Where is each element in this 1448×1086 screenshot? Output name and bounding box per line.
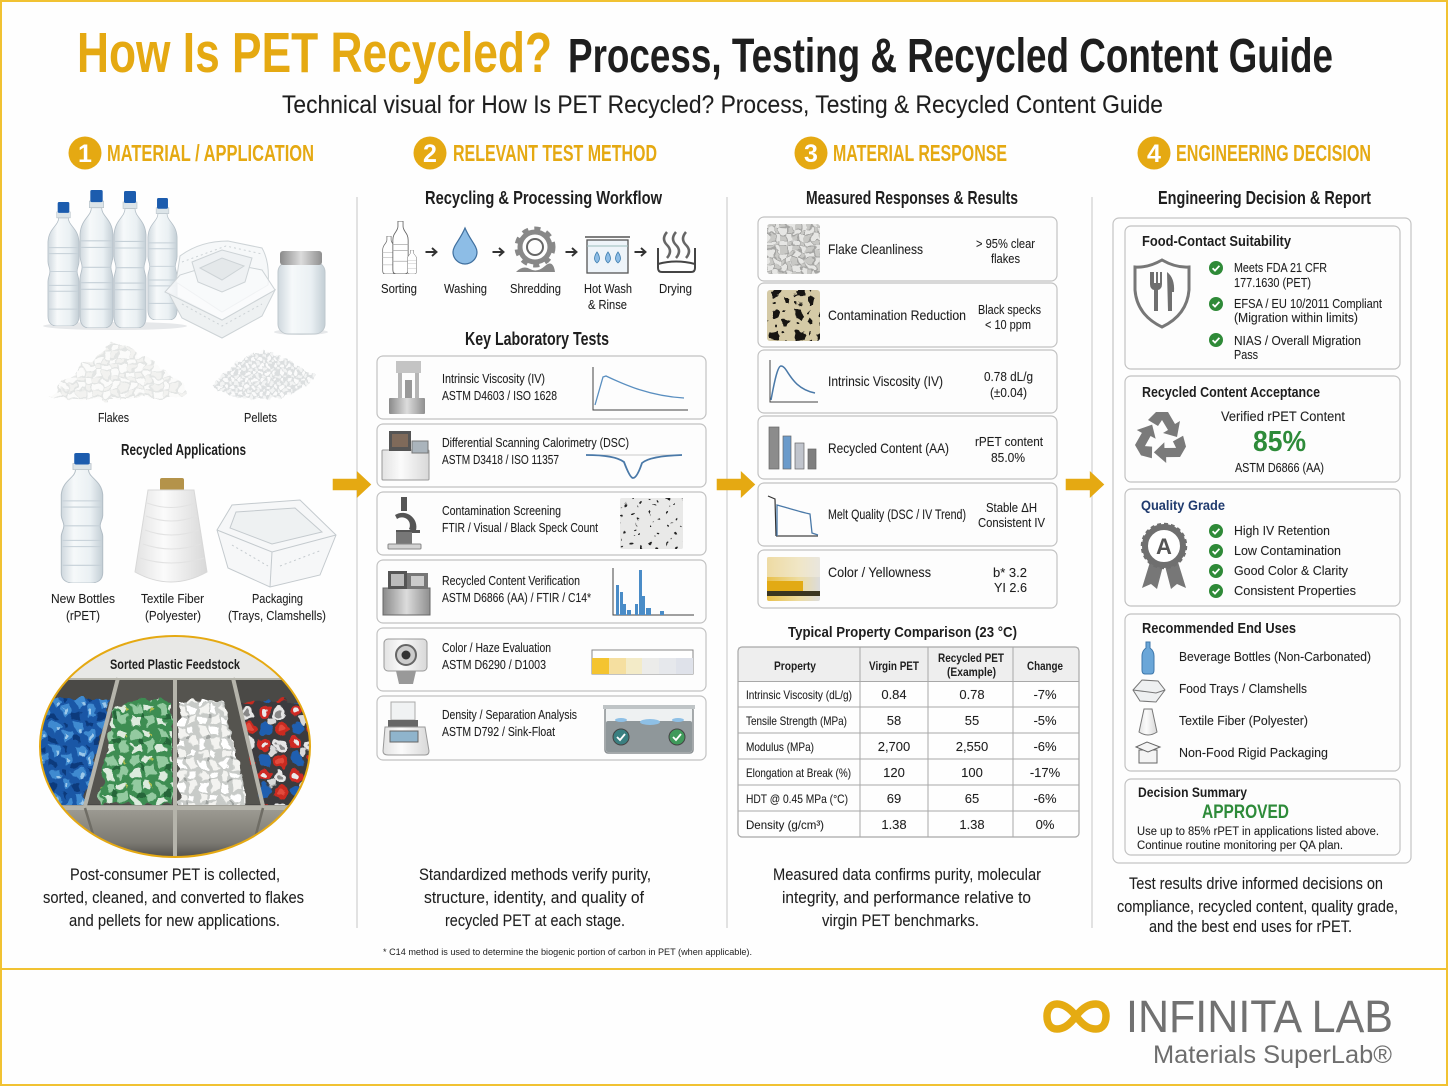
photo: sorted plastic feedstock (34, 634, 318, 859)
icon: grade A badge: A (1156, 534, 1172, 559)
card: food-contact suitability: Food-Contact Suitability (1142, 234, 1291, 250)
table: property comparison: 100 (961, 765, 983, 780)
footnote: * C14 method is used to determine the biogenic portion of carbon in PET (when applicable). (383, 947, 752, 958)
workflow labels: Hot Wash (584, 281, 632, 296)
icon: pellets pile (212, 351, 316, 399)
table: property comparison: 1.38 (959, 817, 985, 832)
icon: flakes pile (51, 342, 188, 399)
result card: intrinsic viscosity (758, 350, 1057, 413)
card: quality grade: Consistent Properties (1234, 583, 1356, 598)
table: property comparison: Change (1027, 659, 1063, 673)
table: property comparison: -5% (1033, 713, 1057, 728)
workflow labels: Washing (444, 281, 487, 296)
labels: new bottles: New Bottles (51, 591, 115, 606)
result card: flake cleanliness: Flake Cleanliness (828, 241, 923, 257)
card: quality grade: Quality Grade (1141, 497, 1225, 513)
table: property comparison: 0.78 (959, 687, 985, 702)
icon: new bottle (61, 453, 103, 583)
table: property comparison: -7% (1033, 687, 1057, 702)
table: property comparison: 2,700 (878, 739, 910, 754)
icon: colorimeter (384, 639, 427, 684)
labels: new bottles (51, 591, 115, 623)
icon: food-safe shield (1135, 260, 1189, 327)
step header 1 (68, 136, 314, 170)
result card: melt quality: Consistent IV (978, 516, 1046, 530)
table: property comparison: -17% (1030, 765, 1061, 780)
card: quality grade: High IV Retention (1234, 523, 1330, 538)
caption: column 2: structure, identity, and quality of (424, 888, 644, 907)
test card: intrinsic viscosity: ASTM D4603 / ISO 1628 (442, 389, 557, 403)
heading: workflow: Recycling & Processing Workflow (425, 187, 662, 208)
workflow labels: Shredding (510, 281, 561, 296)
step header 3: MATERIAL RESPONSE (833, 140, 1007, 166)
table: property comparison: Intrinsic Viscosity (dL/g) (746, 688, 852, 702)
result card: flake cleanliness (758, 217, 1057, 281)
arrow (566, 248, 576, 256)
result card: flake cleanliness: > 95% clear (976, 237, 1035, 251)
step header 4: 4 (1147, 140, 1161, 168)
card: food-contact suitability: Pass (1234, 348, 1258, 362)
heading: measured responses: Measured Responses & Results (806, 188, 1018, 208)
card: decision summary: Decision Summary (1138, 785, 1247, 800)
card: decision summary: APPROVED (1202, 802, 1289, 823)
labels: packaging: (Trays, Clamshells) (228, 608, 326, 623)
workflow labels: Drying (659, 281, 692, 296)
card: quality grade: Low Contamination (1234, 543, 1341, 558)
image: sink-float tank (603, 705, 695, 753)
result card: flake cleanliness: flakes (991, 252, 1020, 266)
test card: recycled content verification (377, 560, 706, 623)
step header 2: RELEVANT TEST METHOD (453, 140, 657, 166)
table: property comparison: Modulus (MPa) (746, 740, 814, 754)
test card: recycled content verification: Recycled Content Verification (442, 574, 580, 588)
table: property comparison: 120 (883, 765, 905, 780)
test card: color and haze (377, 628, 706, 691)
card: food-contact suitability: (Migration within limits) (1234, 311, 1358, 325)
card: recommended end uses: Textile Fiber (Polyester) (1179, 713, 1308, 728)
title (77, 21, 1333, 85)
icon: DSC instrument (382, 431, 429, 480)
card: recycled content acceptance: ASTM D6866 (AA) (1235, 461, 1324, 475)
icon: washing drop (453, 228, 477, 264)
image: speck count sample (620, 498, 683, 549)
test card: DSC (377, 424, 706, 487)
table: property comparison: 2,550 (956, 739, 988, 754)
icon: box (1136, 742, 1160, 763)
result card: intrinsic viscosity: 0.78 dL/g (984, 370, 1033, 384)
table: property comparison: (Example) (947, 665, 996, 679)
label: flakes: Flakes (98, 410, 129, 425)
caption: column 3: Measured data confirms purity, molecular (773, 865, 1041, 884)
test card: intrinsic viscosity (377, 356, 706, 419)
arrow: step 2 to 3 (717, 471, 755, 498)
card: food-contact suitability: EFSA / EU 10/2011 Compliant (1234, 297, 1382, 311)
result card: color yellowness: Color / Yellowness (828, 564, 931, 580)
icon: textile fiber cone (135, 478, 207, 582)
table: property comparison: 65 (965, 791, 979, 806)
workflow labels (381, 281, 692, 312)
label: pellets: Pellets (244, 410, 277, 425)
labels: packaging: Packaging (252, 591, 303, 606)
table: property comparison: HDT @ 0.45 MPa (°C) (746, 792, 848, 806)
card: decision summary: Use up to 85% rPET in applications listed above. (1137, 826, 1379, 838)
icon: grade A badge (1142, 524, 1186, 589)
result card: intrinsic viscosity: (±0.04) (990, 386, 1027, 400)
chart: spectrum peaks (613, 568, 694, 615)
workflow labels: Sorting (381, 281, 417, 296)
icon: infinity mark (1047, 1004, 1106, 1029)
table: property comparison: Recycled PET (938, 651, 1005, 665)
test card: contamination screening (377, 490, 706, 557)
card: recommended end uses: Food Trays / Clamshells (1179, 681, 1307, 696)
caption: column 3: integrity, and performance relative to (782, 888, 1031, 907)
panel: material response (738, 188, 1079, 930)
result card: color yellowness: YI 2.6 (994, 581, 1027, 595)
icon: viscometer (389, 361, 425, 414)
result card: recycled content: Recycled Content (AA) (828, 440, 949, 456)
card: recycled content acceptance: Recycled Content Acceptance (1142, 385, 1320, 401)
result card: contamination reduction: Contamination Reduction (828, 307, 966, 323)
caption: column 1 (43, 865, 304, 930)
card: decision summary (1125, 779, 1400, 855)
caption: column 1: sorted, cleaned, and converted to flakes (43, 888, 304, 907)
caption: column 2: recycled PET at each stage. (445, 911, 625, 930)
title: How Is PET Recycled? (77, 21, 552, 85)
arrow: step 3 to 4 (1066, 471, 1104, 498)
test card: density (377, 696, 706, 760)
result card: color yellowness (758, 550, 1057, 608)
table: property comparison: 58 (887, 713, 901, 728)
subtitle: Technical visual for How Is PET Recycled? Process, Testing & Recycled Content Guide (282, 91, 1163, 119)
test card: DSC: ASTM D3418 / ISO 11357 (442, 453, 559, 467)
logo: Infinita Lab: Materials SuperLab® (1153, 1041, 1393, 1069)
logo: Infinita Lab: INFINITA LAB (1126, 991, 1393, 1042)
table: property comparison: -6% (1033, 739, 1057, 754)
column dividers (357, 197, 1092, 928)
logo: Infinita Lab (1047, 991, 1393, 1069)
test card: density: Density / Separation Analysis (442, 708, 577, 722)
test card: color and haze: Color / Haze Evaluation (442, 641, 551, 655)
card: decision summary: Continue routine monitoring per QA plan. (1137, 840, 1343, 852)
table: property comparison: Density (g/cm³) (746, 818, 824, 832)
caption: column 4: Test results drive informed decisions on (1129, 874, 1383, 893)
result card: melt quality (758, 483, 1057, 546)
step header 3 (794, 136, 1007, 170)
caption: column 2 (419, 865, 651, 930)
table: property comparison: Elongation at Break (%) (746, 766, 851, 780)
result card: intrinsic viscosity: Intrinsic Viscosity (IV) (828, 373, 943, 389)
labels: textile fiber: (Polyester) (145, 608, 201, 623)
step header 2 (414, 136, 657, 170)
heading: recycled applications: Recycled Applications (121, 442, 246, 459)
labels: packaging (228, 591, 326, 623)
result card: melt quality: Melt Quality (DSC / IV Trend) (828, 506, 966, 522)
icon: tray (1133, 680, 1165, 702)
test card: contamination screening: FTIR / Visual / Black Speck Count (442, 521, 598, 535)
table: property comparison: 55 (965, 713, 979, 728)
card: recommended end uses: Beverage Bottles (Non-Carbonated) (1179, 649, 1371, 664)
result card: recycled content: 85.0% (991, 451, 1025, 465)
card: food-contact suitability: Meets FDA 21 CFR (1234, 261, 1327, 275)
result card: contamination reduction: Black specks (978, 303, 1041, 317)
table: property comparison: Tensile Strength (MPa) (746, 714, 847, 728)
table: property comparison: 69 (887, 791, 901, 806)
arrow (426, 248, 436, 256)
card: recycled content acceptance (1125, 376, 1400, 482)
card: recycled content acceptance: 85% (1253, 426, 1306, 458)
result card: contamination reduction: < 10 ppm (985, 318, 1031, 332)
caption: column 4: and the best end uses for rPET. (1149, 917, 1352, 936)
step header 1: 1 (78, 140, 92, 168)
icon: sorting bottles (383, 221, 416, 274)
chart: DSC dip (586, 455, 682, 478)
arrow (634, 248, 646, 256)
chart: color swatches (592, 650, 693, 674)
table: property comparison (738, 647, 1079, 837)
icon: clear jar (274, 251, 328, 335)
heading: key laboratory tests: Key Laboratory Tests (465, 329, 609, 349)
result card: recycled content (758, 416, 1057, 479)
photo: sorted plastic feedstock: Sorted Plastic Feedstock (110, 656, 240, 672)
caption: column 1: and pellets for new applications. (69, 911, 280, 930)
icon: PET bottles (43, 190, 187, 330)
table: property comparison: Property (774, 659, 816, 673)
heading: property comparison: Typical Property Comparison (23 °C) (788, 624, 1017, 641)
card: quality grade: Good Color & Clarity (1234, 563, 1348, 578)
heading: engineering decision: Engineering Decision & Report (1158, 188, 1371, 208)
caption: column 4 (1117, 874, 1398, 936)
arrow: step 1 to 2 (333, 471, 371, 498)
outer report panel (1113, 218, 1411, 863)
caption: column 3 (773, 865, 1041, 930)
icon: recycle symbol (1129, 412, 1190, 467)
icon: drying tray with steam (658, 232, 695, 272)
table: property comparison: Virgin PET (869, 659, 920, 673)
step header 3: 3 (804, 140, 818, 168)
card: recommended end uses (1125, 614, 1400, 771)
step header 4: ENGINEERING DECISION (1176, 140, 1371, 166)
test card: color and haze: ASTM D6290 / D1003 (442, 658, 546, 672)
table: property comparison: 0.84 (881, 687, 907, 702)
card: food-contact suitability: NIAS / Overall Migration (1234, 334, 1361, 348)
card: food-contact suitability (1125, 226, 1400, 369)
icon: balance (383, 702, 429, 755)
icon: spool (1139, 709, 1157, 735)
caption: column 1: Post-consumer PET is collected, (70, 865, 280, 884)
chart: viscosity curve (593, 367, 688, 410)
card: recycled content acceptance: Verified rPET Content (1221, 409, 1345, 424)
workflow labels: & Rinse (588, 297, 627, 312)
test card: density: ASTM D792 / Sink-Float (442, 725, 555, 739)
icon: packaging tray (217, 500, 336, 587)
table: property comparison: 0% (1036, 817, 1055, 832)
labels: textile fiber (141, 591, 205, 623)
test card: contamination screening: Contamination Screening (442, 504, 561, 518)
caption: column 3: virgin PET benchmarks. (822, 911, 979, 930)
labels: textile fiber: Textile Fiber (141, 591, 205, 606)
table: property comparison: 1.38 (881, 817, 907, 832)
step header 2: 2 (423, 140, 437, 168)
step header 4 (1138, 136, 1371, 170)
card: recommended end uses: Non-Food Rigid Packaging (1179, 745, 1328, 760)
icon: AA spectrometer (383, 571, 430, 615)
result card: color yellowness: b* 3.2 (993, 566, 1027, 580)
result card: contamination reduction (758, 283, 1057, 348)
result card: recycled content: rPET content (975, 435, 1043, 449)
icon: hot wash tank (585, 237, 630, 273)
table: property comparison: -6% (1033, 791, 1057, 806)
icon: blue bottle (1142, 642, 1154, 674)
test card: recycled content verification: ASTM D6866 (AA) / FTIR / C14* (442, 591, 591, 605)
test card: DSC: Differential Scanning Calorimetry (DSC) (442, 436, 629, 450)
panel: engineering decision (1113, 188, 1411, 936)
arrow (492, 248, 504, 256)
icon: shredding gear (516, 229, 555, 272)
panel: relevant test method (377, 187, 706, 930)
test card: intrinsic viscosity: Intrinsic Viscosity (IV) (442, 372, 545, 386)
card: food-contact suitability: 177.1630 (PET) (1234, 276, 1311, 290)
icon: microscope (388, 497, 421, 549)
step header 1: MATERIAL / APPLICATION (107, 140, 314, 166)
icon: clear clamshell (165, 241, 275, 338)
result card: melt quality: Stable ΔH (986, 501, 1037, 515)
caption: column 4: compliance, recycled content, quality grade, (1117, 897, 1398, 916)
panel: material and application (34, 190, 336, 930)
labels: new bottles: (rPET) (66, 608, 100, 623)
card: recommended end uses: Recommended End Uses (1142, 621, 1296, 637)
card: quality grade (1125, 489, 1400, 606)
caption: column 2: Standardized methods verify purity, (419, 865, 651, 884)
